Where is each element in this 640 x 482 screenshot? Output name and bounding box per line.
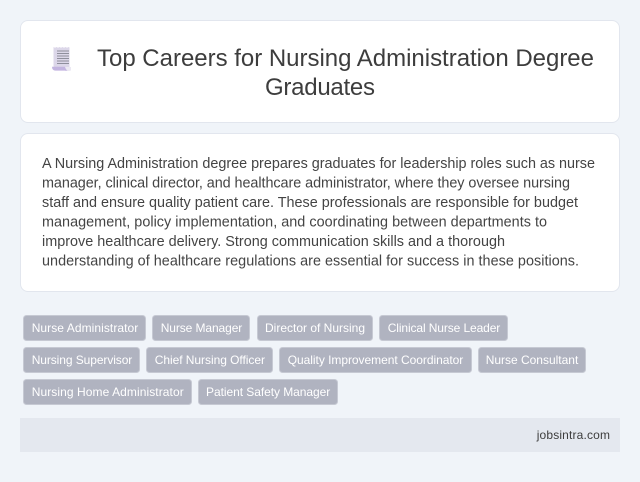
tag: Clinical Nurse Leader xyxy=(380,316,508,340)
description text: improve healthcare delivery. Strong communication skills and a thorough xyxy=(42,234,505,250)
tag: Chief Nursing Officer: Chief Nursing Officer xyxy=(155,353,265,367)
tag: Quality Improvement Coordinator xyxy=(280,348,472,372)
header panel xyxy=(20,20,620,123)
description text: A Nursing Administration degree prepares graduates for leadership roles such as nurse xyxy=(42,156,595,172)
footer source: jobsintra.com xyxy=(536,428,610,442)
tag: Director of Nursing: Director of Nursing xyxy=(265,321,365,335)
description text: understanding of healthcare regulations are essential for success in these positions. xyxy=(42,254,579,270)
tag: Patient Safety Manager: Patient Safety Manager xyxy=(206,385,330,399)
tag: Nurse Manager: Nurse Manager xyxy=(161,321,242,335)
tag: Patient Safety Manager xyxy=(198,380,338,404)
tag: Nursing Supervisor: Nursing Supervisor xyxy=(32,353,132,367)
tag: Nurse Administrator xyxy=(24,316,146,340)
tag: Nursing Home Administrator: Nursing Home Administrator xyxy=(32,385,184,399)
tag: Chief Nursing Officer xyxy=(146,348,272,372)
footer bar xyxy=(20,418,620,452)
tag: Quality Improvement Coordinator: Quality Improvement Coordinator xyxy=(288,353,463,367)
tag: Nursing Supervisor xyxy=(24,348,140,372)
tag: Nurse Manager xyxy=(152,316,250,340)
description text: management, policy implementation, and coordinating between departments to xyxy=(42,214,547,230)
description panel xyxy=(20,133,620,292)
tag: Director of Nursing xyxy=(258,316,372,340)
title: Top Careers for Nursing Administration Degree xyxy=(97,45,594,72)
tag: Nursing Home Administrator xyxy=(24,380,192,404)
description text: staff and ensure quality patient care. These professionals are responsible for budget xyxy=(42,195,578,211)
tag: Clinical Nurse Leader: Clinical Nurse Leader xyxy=(388,321,500,335)
title xyxy=(97,45,594,101)
description text xyxy=(42,156,595,270)
tag: Nurse Consultant: Nurse Consultant xyxy=(486,353,579,367)
tag: Nurse Administrator: Nurse Administrator xyxy=(32,321,138,335)
title: Graduates xyxy=(265,74,375,101)
icon: document scroll xyxy=(52,47,71,71)
description text: manager, clinical director, and healthcare administrator, where they oversee nursing xyxy=(42,176,570,192)
tag: Nurse Consultant xyxy=(478,348,586,372)
